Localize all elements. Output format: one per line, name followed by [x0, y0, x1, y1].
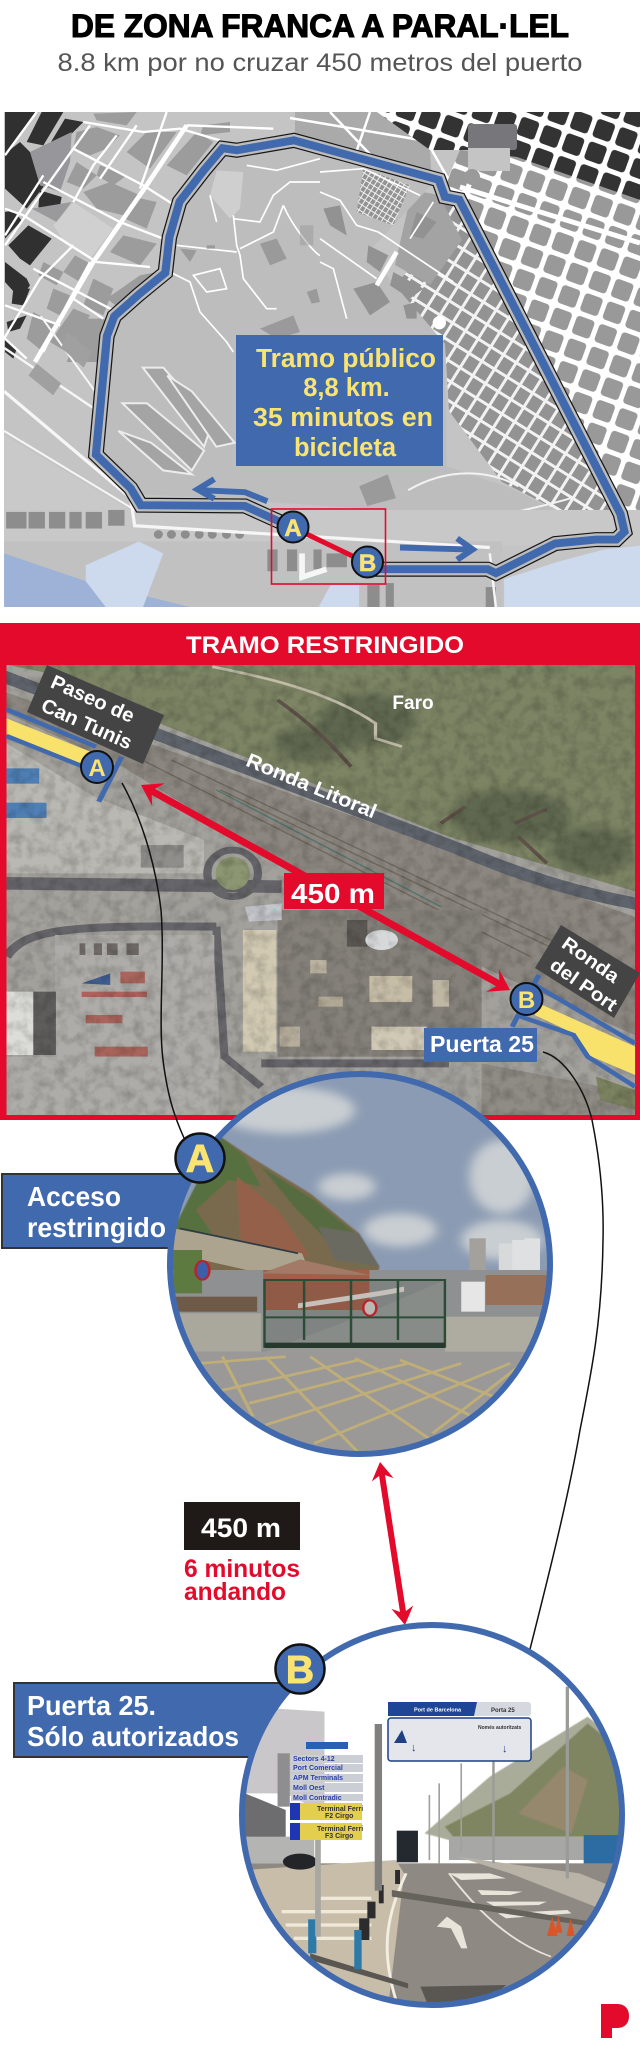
photo B: gantry sign: Port de Barcelona [414, 1708, 462, 1714]
map: square building [464, 124, 517, 185]
label: Puerta 25 Solo autorizados: Sólo autorizados [27, 1721, 239, 1752]
arrow: 450 m double arrow [141, 783, 510, 992]
label: Puerta 25: Puerta 25 [430, 1031, 534, 1057]
photo B: direction signs: Terminal Ferri [317, 1826, 363, 1833]
photo A: brick wall right [486, 1275, 547, 1305]
map: lower west blocks [28, 338, 86, 395]
photo A: fence on wall [180, 1228, 298, 1253]
photo A: brick building [263, 1270, 369, 1310]
label: Puerta 25 Solo autorizados: Puerta 25. [27, 1690, 156, 1721]
map: cemetery terraces [118, 368, 235, 474]
map: north streets [290, 112, 448, 180]
road highlight near A [7, 709, 122, 802]
panel: restricted segment [0, 623, 640, 1120]
map: dark Eixample grid [377, 112, 640, 200]
distance box [184, 1502, 300, 1550]
photo B: ring [242, 1625, 622, 2005]
label: Paseo de Can Tunis: Paseo de [47, 671, 138, 728]
photo B: shadows [392, 1890, 592, 1927]
photo A: traffic sign [196, 1261, 209, 1280]
map: upper park paths and buildings [170, 159, 320, 352]
marker A on satellite: A [88, 755, 106, 782]
arrow: direction west [198, 479, 267, 501]
walking time: andando [184, 1578, 286, 1606]
satellite image [0, 663, 640, 1120]
photo B: hillside [424, 1717, 624, 1840]
callout: public segment: 8,8 km. [303, 374, 390, 402]
photo B: truck and car [397, 1831, 418, 1862]
map: route outline and public route [96, 140, 624, 573]
photo B: direction signs: Moll Oest [293, 1785, 325, 1792]
marker B on map [352, 546, 383, 578]
label: Acceso restringido: Acceso [27, 1181, 121, 1212]
photo B: gantry sign: ↓ [502, 1743, 508, 1755]
walking time: 6 minutos [184, 1555, 300, 1583]
marker A on map [278, 512, 308, 542]
photo B: bollards [359, 1870, 400, 1940]
map: wide street [460, 187, 640, 243]
map: lower slope paths [408, 472, 571, 510]
photo B: direction signs: F2 Cirgo [325, 1813, 353, 1820]
map: water [4, 553, 192, 608]
photo B: direction signs: Sectors 4-12 [293, 1756, 335, 1763]
line: from map A to photo A [122, 783, 184, 1138]
satellite: port lots [7, 743, 204, 873]
photo A: road surface [171, 1270, 551, 1357]
distance label: 450 m [291, 878, 375, 909]
label: Ronda del Port: Ronda [558, 933, 623, 988]
locator rectangle [272, 509, 386, 584]
photo B: cones [547, 1915, 575, 1936]
photo B: gantry sign: Porta 25 [491, 1708, 515, 1714]
photo A: concrete blocks [180, 1313, 261, 1352]
marker A large [176, 1134, 224, 1182]
satellite: Ronda Litoral road [0, 675, 640, 907]
photo A: van [461, 1282, 485, 1312]
map: port land [386, 510, 640, 535]
map: palace and fair area [320, 169, 453, 329]
photo B: direction signs: Port Comercial [293, 1765, 343, 1772]
photo B: fence wall [449, 1837, 588, 1860]
photo B: direction signs: Terminal Ferri [317, 1806, 363, 1813]
callout: public segment: 35 minutos en [253, 404, 433, 432]
photo B: poles [375, 1724, 382, 1891]
map: dark industrial blocks [5, 112, 83, 359]
photo B: direction signs: APM Terminals [293, 1775, 343, 1782]
marker B large: B [286, 1649, 314, 1692]
logo [601, 2004, 629, 2038]
subtitle: 8.8 km por no cruzar 450 metros del puerto [58, 49, 582, 77]
photo A: sky [155, 1070, 563, 1283]
satellite: silo and industrial plant [278, 910, 482, 1057]
satellite: hill darker patches [273, 693, 633, 873]
label: Acceso restringido [2, 1174, 197, 1248]
photo A: retaining wall [173, 1228, 310, 1273]
map: Montjuic park and port area [4, 144, 640, 608]
marker B on satellite [510, 983, 542, 1015]
marker B on satellite: B [518, 987, 535, 1014]
marker A on map: A [284, 515, 302, 542]
photo A: hillside [171, 1137, 380, 1280]
arrow: direction east [400, 538, 473, 560]
label: Acceso restringido: restringido [27, 1212, 166, 1243]
photo A: ring [170, 1074, 550, 1454]
photo A: no-entry sign [363, 1300, 376, 1316]
distance label [284, 873, 384, 909]
label: Ronda del Port [535, 925, 640, 1018]
map: main roads [4, 316, 496, 608]
satellite: lower left yard [55, 935, 214, 1062]
map: large lots by the route [395, 190, 462, 285]
line: from Puerta 25 to photo B [527, 1052, 603, 1661]
marker B large [276, 1644, 324, 1694]
title: DE ZONA FRANCA A PARAL·LEL [71, 8, 569, 44]
map: port buildings [6, 510, 496, 607]
satellite: hillside [0, 663, 640, 897]
panel heading: TRAMO RESTRINGIDO [186, 632, 464, 659]
marker B on map: B [359, 550, 376, 577]
label: Ronda Litoral: Ronda Litoral [243, 750, 380, 823]
photo B: gantry sign [388, 1702, 531, 1761]
map: west streets [0, 112, 273, 362]
satellite: roads and roundabout [7, 883, 449, 1087]
label: Puerta 25 Solo autorizados [14, 1683, 289, 1757]
map: north city blocks [295, 112, 432, 186]
road highlight near B [512, 975, 635, 1087]
satellite: lower right area [482, 1063, 640, 1120]
label: Paseo de Can Tunis [27, 665, 164, 764]
restricted segment line [306, 532, 354, 558]
panel: route map [0, 112, 640, 608]
photo A: barrier [298, 1287, 404, 1308]
photo: gate B [237, 1620, 629, 2010]
photo B: building [245, 1707, 324, 1813]
photo A: left greenery and rails [173, 1250, 202, 1293]
marker A on satellite [81, 751, 113, 783]
arrow: between photos [372, 1462, 413, 1625]
satellite: railway yard [0, 690, 640, 1043]
satellite: texture [6, 665, 636, 1115]
map: west city blocks [0, 112, 273, 362]
photo: gate A [155, 1070, 563, 1458]
label: Paseo de Can Tunis: Can Tunis [38, 695, 135, 754]
satellite: rail lines [144, 760, 552, 958]
photo B: road markings [437, 1873, 571, 1948]
photo B: gantry sign: ↓ [411, 1742, 416, 1754]
marker A large: A [186, 1138, 214, 1181]
map: castle [359, 474, 396, 506]
satellite: hill footpath [212, 667, 402, 747]
walking time [184, 1555, 300, 1606]
label: Faro: Faro [392, 693, 434, 714]
photo B: direction signs: Moll Contradic [293, 1795, 342, 1802]
map: Poble Sec fan grid [402, 204, 610, 510]
photo A: yellow grid [200, 1357, 518, 1453]
map: grey Eixample grid [445, 150, 640, 535]
photo A: pavement [171, 1352, 551, 1458]
panel frame [0, 623, 640, 1120]
photo B: gantry sign: Només autoritzats [478, 1725, 522, 1731]
callout: public segment: bicicleta [294, 434, 397, 462]
photo B: direction signs: F3 Cirgo [325, 1833, 353, 1840]
satellite: hill brown ravines [278, 700, 547, 863]
photo A: gate [264, 1280, 445, 1347]
photo B: ground [237, 1863, 629, 2010]
photo B: direction signs [290, 1742, 363, 1840]
callout: public segment [236, 335, 443, 466]
label: Ronda del Port: del Port [546, 955, 621, 1017]
photo A: tanks [469, 1238, 486, 1275]
photo B: blue container [584, 1835, 624, 1883]
distance box: 450 m [201, 1513, 281, 1543]
callout: public segment: Tramo público [256, 345, 436, 373]
